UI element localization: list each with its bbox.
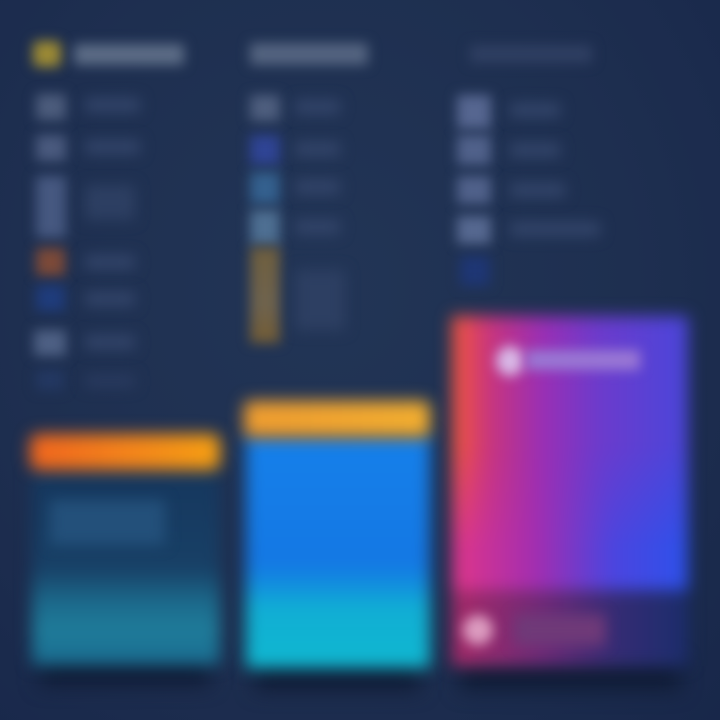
icon: item 6	[34, 330, 66, 356]
icon: item 5	[460, 256, 490, 286]
text: item 1	[85, 98, 140, 112]
icon: card heading	[496, 346, 524, 376]
heading: card	[526, 350, 640, 370]
icon: item 3	[250, 172, 280, 204]
icon: item 3	[36, 176, 66, 238]
icon: item 4	[457, 216, 491, 244]
card footer	[452, 590, 688, 666]
text: item 2	[295, 142, 340, 156]
text: item 2	[85, 140, 140, 154]
icon: item 1	[36, 94, 66, 120]
card fill: lower glow	[452, 446, 688, 590]
panel: column 3	[439, 44, 700, 694]
icon: item 4	[250, 210, 280, 245]
icon: item 3	[457, 176, 491, 204]
card body: column 1	[32, 470, 220, 665]
icon: item 1	[457, 95, 491, 129]
icon: column 1 heading	[33, 41, 61, 67]
card fill: vertical gradient	[452, 316, 688, 590]
shadow: card column 1	[40, 655, 210, 685]
heading: column 1	[74, 44, 184, 65]
text: item 6	[85, 335, 135, 349]
icon: item 5	[36, 285, 65, 311]
icon: item 2	[457, 135, 491, 165]
text: card rows column 1	[50, 500, 165, 545]
text: item 7	[85, 375, 135, 387]
text: item 3	[85, 185, 135, 220]
shadow: card column 2	[255, 660, 420, 690]
icon: item 1	[250, 95, 280, 121]
header bar: column 1	[30, 434, 220, 470]
text: item 5	[295, 270, 345, 330]
heading: column 3	[470, 45, 592, 63]
icon: item 5	[250, 247, 280, 343]
text: item 3	[510, 183, 565, 197]
heading: column 2	[250, 43, 368, 65]
shadow: card column 3	[460, 660, 680, 690]
icon: item 2	[250, 135, 280, 165]
card body: column 2	[246, 436, 430, 668]
icon: item 2	[36, 135, 66, 161]
text: item 4	[295, 220, 340, 234]
text: item 1	[295, 100, 340, 114]
text: item 2	[510, 143, 560, 157]
text: item 4	[510, 222, 600, 236]
icon: item 7	[36, 370, 64, 390]
text: card footer	[515, 615, 605, 645]
text: item 4	[85, 255, 135, 269]
text: item 5	[85, 292, 135, 306]
card: highlighted column 3	[439, 303, 700, 678]
header bar: column 2	[244, 401, 430, 437]
text: item 3	[295, 180, 340, 194]
text: item 1	[510, 103, 560, 117]
icon: card footer	[463, 615, 493, 645]
icon: item 4	[36, 248, 65, 276]
